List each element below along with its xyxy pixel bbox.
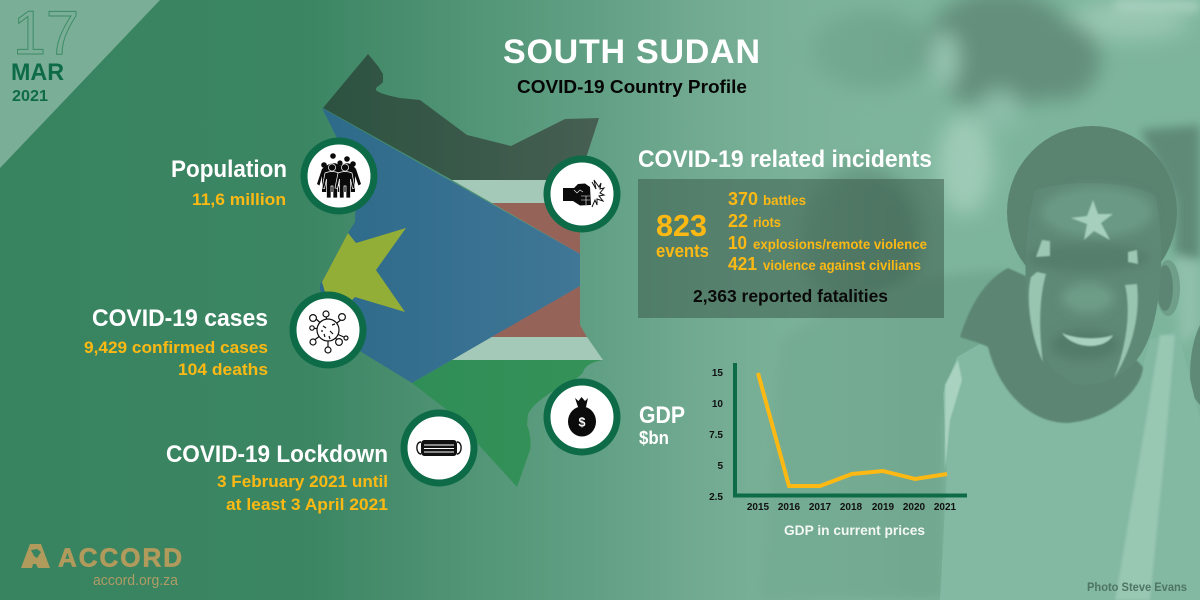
line chart: GDP: 2017 [809, 502, 832, 513]
panel: incidents [638, 179, 944, 318]
line chart: GDP: GDP in current prices [784, 522, 925, 538]
map: dark band [323, 54, 599, 180]
line chart: GDP: 5 [717, 461, 723, 472]
confirmed cases: 9,429 confirmed cases [84, 339, 268, 357]
battles: 370 [728, 189, 758, 209]
line chart: GDP: 2018 [840, 502, 863, 513]
lockdown end: at least 3 April 2021 [226, 496, 388, 514]
shirt [940, 330, 1200, 600]
lockdown heading: COVID-19 Lockdown [166, 441, 388, 468]
deaths: 104 deaths [178, 361, 268, 379]
line chart: GDP [709, 363, 967, 538]
map: upper red band [492, 203, 580, 254]
fatalities: 2,363 reported fatalities [693, 286, 888, 306]
forehead star [1071, 200, 1113, 240]
events total: 823 [656, 208, 707, 243]
line chart: GDP: 2021 [934, 502, 957, 513]
icon: face mask [404, 413, 474, 483]
month: MAR [11, 59, 64, 86]
population block [171, 156, 287, 209]
GDP label: GDP [639, 402, 685, 429]
date corner panel [0, 0, 160, 168]
logo: ACCORD [21, 542, 182, 589]
events label: events [656, 241, 709, 261]
covid-19 cases block [84, 305, 268, 379]
nose [1062, 283, 1114, 313]
teeth [1062, 333, 1113, 346]
line chart: GDP: 2020 [903, 502, 926, 513]
left arm [760, 270, 1010, 600]
cases heading: COVID-19 cases [92, 305, 268, 332]
violence against civilians: 421 [728, 254, 757, 274]
line chart: GDP: 2019 [872, 502, 895, 513]
line chart: GDP: 7.5 [709, 430, 723, 441]
lockdown block [166, 441, 388, 514]
eye band [1026, 244, 1150, 272]
map: blue triangle [320, 108, 580, 383]
explosions: 10 [728, 233, 747, 253]
face [1025, 183, 1161, 385]
map: lower red band [491, 286, 587, 337]
painted streaks [1036, 240, 1050, 257]
map: green band [412, 360, 603, 487]
line chart: GDP: 15 [712, 368, 723, 379]
GDP label: $bn [639, 428, 669, 448]
right arm dark edge [1190, 325, 1200, 405]
map: lower white band [452, 337, 603, 360]
incidents heading: COVID-19 related incidents [638, 146, 932, 173]
icon: people [304, 141, 374, 211]
violence against civilians: violence against civilians [763, 257, 921, 273]
battles: battles [763, 192, 806, 208]
mouth area [1051, 330, 1119, 360]
population value: 11,6 million [192, 191, 286, 209]
population heading: Population [171, 156, 287, 183]
logo: ACCORD: ACCORD [58, 542, 182, 572]
lockdown start: 3 February 2021 until [217, 473, 388, 491]
explosions [728, 233, 927, 253]
line chart: GDP: 10 [712, 399, 723, 410]
riots: 22 [728, 211, 748, 231]
explosions: explosions/remote violence [753, 236, 927, 252]
icon: fist impact [547, 159, 617, 229]
logo: ACCORD: accord.org.za [93, 572, 179, 589]
ears [1156, 260, 1180, 316]
subtitle: COVID-19 Country Profile [517, 76, 747, 97]
violence against civilians [728, 254, 921, 274]
hair [1007, 126, 1177, 298]
year: 2021 [12, 88, 48, 105]
GDP label [639, 402, 685, 448]
map: upper white band [452, 180, 585, 203]
riots: riots [753, 214, 781, 230]
dark shoulder and collar mass [960, 268, 1143, 423]
icon: virus [293, 295, 363, 365]
line chart: GDP: 2.5 [709, 492, 723, 503]
map of South Sudan in flag colours [320, 54, 603, 487]
battles [728, 189, 806, 209]
icon: money bag [547, 382, 617, 452]
line chart: GDP: 2015 [747, 502, 770, 513]
icon: money bag: $ [579, 416, 586, 430]
photo credit: Photo Steve Evans [1087, 582, 1187, 594]
forehead [1041, 187, 1153, 237]
title: SOUTH SUDAN [503, 33, 760, 71]
riots [728, 211, 781, 231]
map: yellow star [322, 228, 406, 312]
line chart: GDP: 2016 [778, 502, 801, 513]
day number: 17 [13, 0, 79, 68]
